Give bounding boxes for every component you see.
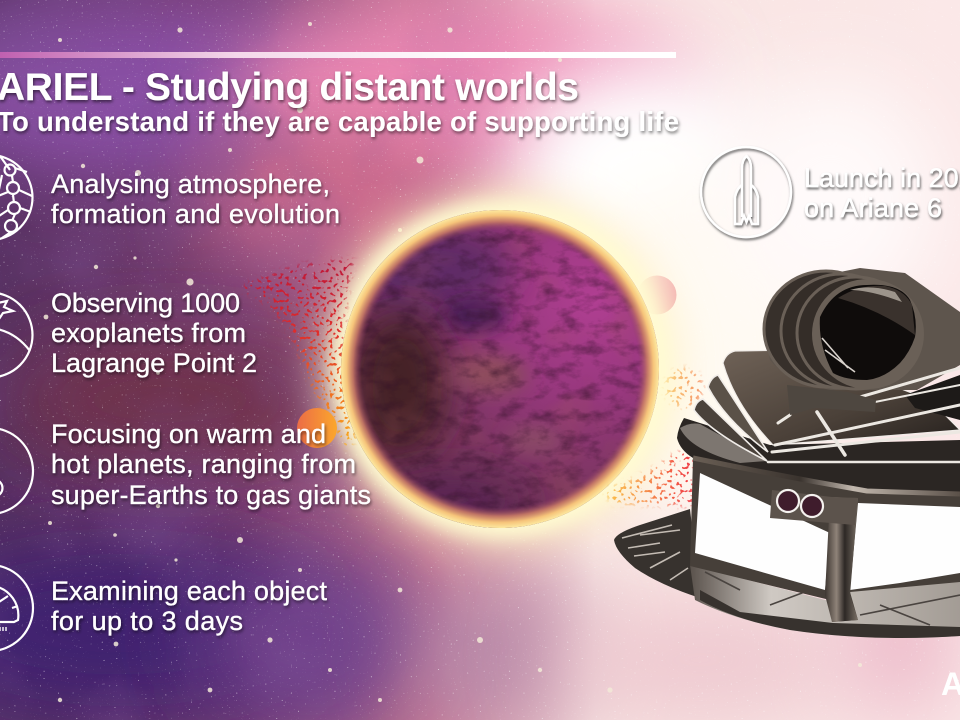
particle cloud left of planet: [244, 256, 357, 450]
particle cloud right of planet, yellow: [662, 364, 706, 410]
icon: gauge: [0, 565, 33, 651]
title: ARIEL - Studying distant worlds: [0, 66, 579, 109]
equipment bay frame: [690, 458, 960, 622]
text: Examining each object: [51, 576, 327, 606]
subtitle: To understand if they are capable of supporting life: [0, 106, 679, 137]
pink distant planet: [638, 276, 676, 314]
optical bench plate: [677, 418, 960, 495]
support struts: [768, 368, 960, 462]
icon: atmosphere cells: [0, 155, 32, 240]
text: Focusing on warm and: [51, 419, 326, 449]
text: for up to 3 days: [51, 606, 243, 636]
icon: planets: [0, 428, 33, 514]
text: on Ariane 6: [804, 193, 942, 223]
white panel left: [695, 473, 830, 590]
planet glow: [314, 183, 686, 555]
icon: orbit and spacecraft: [0, 292, 32, 378]
ARIEL spacecraft: [614, 268, 960, 638]
launch callout: [701, 147, 960, 237]
text: Lagrange Point 2: [51, 348, 257, 378]
icon: Ariane 6 rocket: [701, 147, 791, 237]
twin star trackers: [770, 490, 858, 525]
white panel right: [850, 503, 960, 590]
lower silver skirt: [690, 565, 960, 638]
telescope baffle: [763, 268, 960, 390]
text: Observing 1000: [51, 288, 240, 318]
lower shield plate: [614, 509, 700, 598]
planet: [340, 210, 660, 530]
item 4: examining each object: [0, 565, 327, 651]
centre post: [825, 497, 858, 622]
text: super-Earths to gas giants: [51, 480, 371, 510]
item 1: atmosphere: [0, 155, 340, 240]
orange distant planet: [297, 408, 337, 448]
black lattice under baffle: [905, 375, 960, 420]
text: hot planets, ranging from: [51, 449, 356, 479]
top bar: [0, 52, 676, 58]
item 3: warm and hot planets: [0, 419, 371, 514]
text: exoplanets from: [51, 318, 246, 348]
text: formation and evolution: [51, 199, 340, 229]
radiator dishes: [694, 399, 767, 461]
text: Analysing atmosphere,: [51, 169, 330, 199]
instrument module: [787, 385, 876, 415]
particle cloud right of planet, red: [602, 448, 693, 510]
item 2: Lagrange point: [0, 288, 257, 378]
